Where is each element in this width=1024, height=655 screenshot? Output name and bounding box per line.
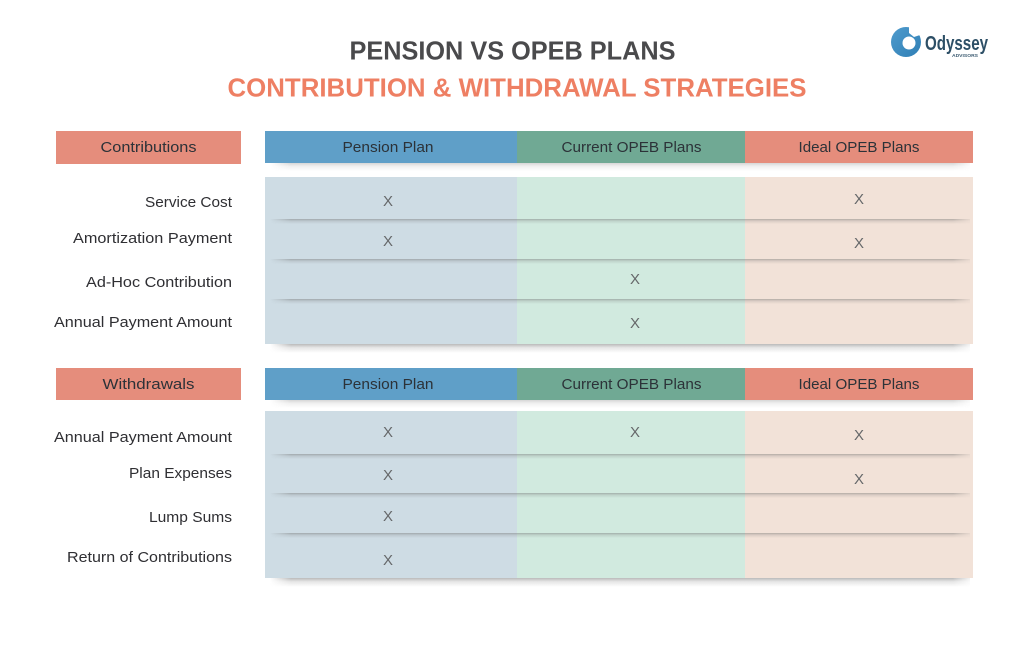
contributions marks: X — [383, 193, 393, 210]
withdrawals row labels: Plan Expenses — [129, 466, 232, 482]
contributions marks: X — [630, 315, 640, 332]
contributions marks: X — [630, 271, 640, 288]
withdrawals column headers: Current OPEB Plans — [562, 377, 702, 393]
withdrawals column headers: Ideal OPEB Plans — [798, 377, 920, 393]
contributions row labels — [54, 195, 232, 331]
contributions column headers: Ideal OPEB Plans — [798, 140, 920, 156]
withdrawals marks — [383, 424, 864, 569]
withdrawals label: Withdrawals — [102, 377, 194, 393]
withdrawals row labels: Annual Payment Amount — [54, 430, 232, 446]
withdrawals row labels: Return of Contributions — [67, 550, 232, 566]
withdrawals marks: X — [383, 424, 393, 441]
contributions marks: X — [854, 235, 864, 252]
contributions column headers — [265, 131, 973, 171]
panel: contributions — [54, 131, 973, 353]
withdrawals marks: X — [383, 552, 393, 569]
contributions row labels: Ad-Hoc Contribution — [86, 275, 232, 291]
withdrawals column headers — [265, 368, 973, 408]
withdrawals row labels — [54, 430, 232, 566]
contributions marks — [383, 191, 864, 332]
contributions label — [56, 131, 241, 164]
withdrawals marks: X — [630, 424, 640, 441]
logo: Odyssey Advisors — [891, 26, 989, 58]
contributions row labels: Annual Payment Amount — [54, 315, 232, 331]
title: PENSION VS OPEB PLANS — [350, 36, 676, 66]
withdrawals column headers: Pension Plan — [342, 377, 434, 393]
contributions label: Contributions — [100, 140, 196, 156]
contributions column headers: Current OPEB Plans — [562, 140, 702, 156]
logo: Odyssey Advisors: ADVISORS — [952, 53, 978, 58]
contributions column headers: Pension Plan — [342, 140, 434, 156]
contributions row labels: Amortization Payment — [73, 231, 232, 247]
withdrawals marks: X — [854, 427, 864, 444]
withdrawals row labels: Lump Sums — [149, 510, 232, 526]
withdrawals table body — [265, 411, 973, 587]
title — [228, 36, 806, 102]
withdrawals marks: X — [383, 508, 393, 525]
withdrawals label — [56, 368, 241, 400]
withdrawals marks: X — [854, 471, 864, 488]
contributions marks: X — [854, 191, 864, 208]
contributions table body — [265, 177, 973, 353]
panel: withdrawals — [54, 368, 973, 587]
withdrawals marks: X — [383, 467, 393, 484]
title: CONTRIBUTION & WITHDRAWAL STRATEGIES — [228, 72, 806, 102]
contributions marks: X — [383, 233, 393, 250]
logo: Odyssey Advisors: Odyssey — [925, 33, 989, 55]
contributions row labels: Service Cost — [145, 195, 232, 211]
